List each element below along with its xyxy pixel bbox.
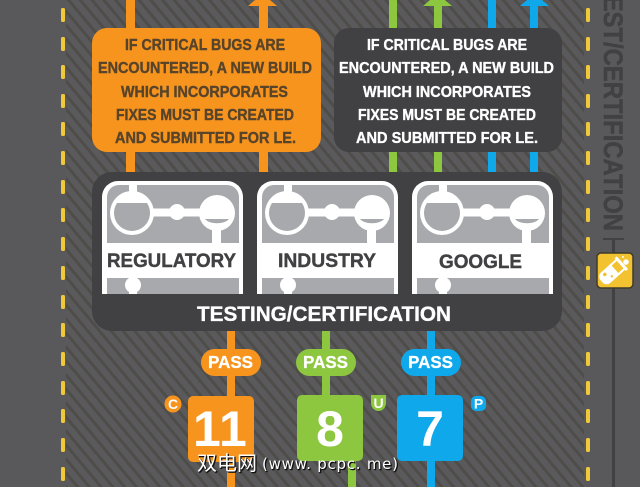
callout: orange critical bugs: IF CRITICAL BUGS ARE bbox=[125, 37, 285, 54]
callout: dark critical bugs: ENCOUNTERED, A NEW BUILD bbox=[339, 60, 554, 77]
badge: P bbox=[471, 396, 486, 412]
count box: 7 bbox=[397, 395, 463, 461]
badge: U bbox=[371, 395, 386, 411]
right dashed yellow line bbox=[586, 8, 590, 481]
callout: orange critical bugs: FIXES MUST BE CREATED bbox=[116, 107, 294, 124]
card: regulatory bbox=[102, 181, 243, 294]
count box: 11 bbox=[188, 396, 254, 462]
pass pill: green bbox=[296, 349, 356, 376]
pass pill: green: PASS bbox=[303, 352, 348, 372]
icon: test tube badge bbox=[596, 253, 633, 288]
count box: 11: 11 bbox=[193, 401, 247, 457]
pass pill: orange: PASS bbox=[208, 352, 253, 372]
badge: U: U bbox=[373, 395, 384, 411]
green flow lines bbox=[322, 0, 452, 487]
callout: orange critical bugs: ENCOUNTERED, A NEW BUILD bbox=[98, 60, 312, 77]
watermark: 双电网 bbox=[198, 453, 258, 476]
callout: dark critical bugs bbox=[334, 28, 562, 152]
card: google: GOOGLE bbox=[439, 251, 522, 273]
badge: P: P bbox=[474, 396, 483, 412]
count box: 7: 7 bbox=[416, 401, 444, 457]
callout: dark critical bugs: WHICH INCORPORATES bbox=[363, 84, 531, 101]
pass pill: orange bbox=[201, 349, 261, 376]
pass pill: blue bbox=[401, 349, 461, 376]
card: google bbox=[412, 181, 553, 294]
left dashed yellow line bbox=[61, 8, 65, 481]
blue flow lines bbox=[427, 0, 549, 487]
panel: testing/certification bbox=[92, 172, 562, 331]
callout: orange critical bugs: AND SUBMITTED FOR LE. bbox=[115, 130, 296, 147]
badge: C bbox=[164, 396, 182, 412]
callout: dark critical bugs: IF CRITICAL BUGS ARE bbox=[367, 37, 527, 54]
panel heading: TESTING/CERTIFICATION bbox=[197, 302, 451, 326]
callout: orange critical bugs bbox=[92, 28, 321, 152]
watermark: (www. pcpc. me) bbox=[263, 456, 399, 474]
vertical label: test/certification bbox=[598, 0, 628, 487]
pass pill: blue: PASS bbox=[408, 352, 453, 372]
watermark: 双电网 bbox=[197, 452, 257, 475]
badge: C: C bbox=[168, 396, 178, 412]
card: industry bbox=[257, 181, 398, 294]
callout: dark critical bugs: FIXES MUST BE CREATED bbox=[358, 107, 536, 124]
callout: dark critical bugs: AND SUBMITTED FOR LE. bbox=[356, 130, 538, 147]
card: regulatory: REGULATORY bbox=[107, 250, 236, 272]
callout: orange critical bugs: WHICH INCORPORATES bbox=[121, 84, 288, 101]
watermark bbox=[197, 452, 399, 476]
card: industry: INDUSTRY bbox=[278, 250, 376, 272]
count box: 8: 8 bbox=[316, 401, 344, 457]
orange flow lines bbox=[126, 0, 277, 487]
watermark: (www. pcpc. me) bbox=[262, 455, 398, 473]
count box: 8 bbox=[297, 395, 363, 461]
